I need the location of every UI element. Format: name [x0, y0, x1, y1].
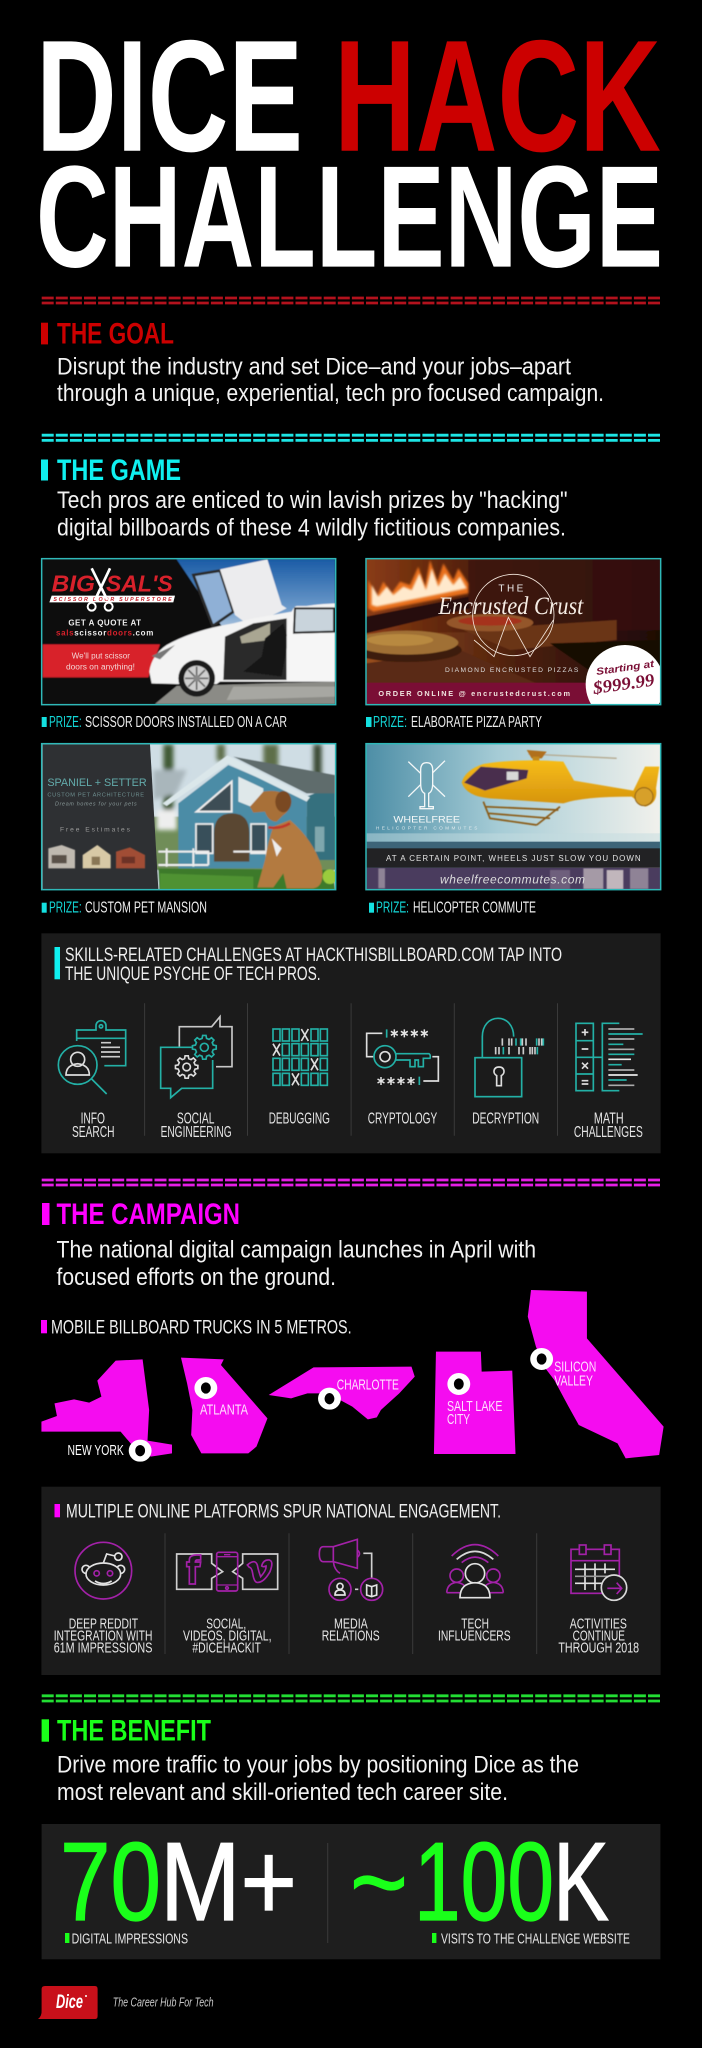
label: decryption: DECRYPTION — [472, 1110, 539, 1127]
icon: reddit — [75, 1542, 132, 1599]
subheading: mobile billboard trucks: MOBILE BILLBOARD TRUCKS IN 5 METROS. — [51, 1316, 352, 1338]
map labels: SALT LAKE — [447, 1399, 503, 1415]
label: reddit: INTEGRATION WITH — [54, 1629, 152, 1645]
label: reddit — [54, 1617, 152, 1657]
billboard: The Encrusted Crust: Encrusted Crust — [437, 592, 584, 620]
label: activities: CONTINUE — [573, 1629, 625, 1645]
label: media relations: RELATIONS — [322, 1629, 380, 1645]
label: social engineering — [161, 1110, 232, 1141]
map: five metro states — [41, 1290, 664, 1459]
label: social engineering: SOCIAL — [177, 1110, 215, 1127]
billboard: Wheelfree helicopter commutes: WHEELFREE — [393, 815, 460, 825]
billboard: The Encrusted Crust: ORDER ONLINE @ encrustedcrust.com — [378, 689, 570, 698]
billboard logo — [49, 568, 175, 611]
title — [36, 7, 663, 298]
label: tech influencers: INFLUENCERS — [438, 1629, 511, 1645]
section: the campaign: The national digital campaign launches in April with — [56, 1236, 536, 1263]
title: DICE — [36, 7, 303, 185]
billboard: Wheelfree helicopter commutes — [366, 743, 661, 890]
section: the campaign: focused efforts on the ground. — [56, 1264, 336, 1291]
label: social engineering: ENGINEERING — [161, 1124, 232, 1141]
section: the goal — [41, 318, 604, 407]
prize caption: helicopter commute — [369, 900, 536, 917]
billboard: Big Sal's scissor doors: salsscissordoors.com — [56, 628, 153, 637]
billboard: The Encrusted Crust: DIAMOND ENCRUSTED PIZZAS — [445, 667, 579, 674]
prize caption: helicopter commute: PRIZE: — [376, 900, 409, 917]
icon: tech influencers — [447, 1545, 503, 1598]
section: the game: digital billboards of these 4 wildly fictitious companies. — [57, 515, 566, 542]
prize caption: scissor doors: PRIZE: — [49, 714, 82, 731]
stat label: digital impressions: DIGITAL IMPRESSIONS — [72, 1930, 188, 1947]
prize caption: helicopter commute: HELICOPTER COMMUTE — [413, 900, 536, 917]
billboard: Wheelfree helicopter commutes: AT A CERTAIN POINT, WHEELS JUST SLOW YOU DOWN — [386, 854, 641, 863]
stat: ~100K: K — [553, 1820, 609, 1944]
section: the game: THE GAME — [57, 454, 181, 487]
label: activities: THROUGH 2018 — [558, 1641, 639, 1657]
panel: skills-related challenges — [41, 933, 661, 1153]
stat: ~100K: 100 — [414, 1820, 554, 1944]
state: California — [528, 1290, 664, 1458]
icon: math challenges — [576, 1023, 643, 1091]
label: info search — [72, 1110, 114, 1141]
section: the campaign: THE CAMPAIGN — [56, 1198, 240, 1231]
prize caption: pizza party — [366, 714, 542, 731]
billboard: The Encrusted Crust: $999.99 — [591, 670, 656, 698]
label: social platforms — [183, 1617, 272, 1657]
stat label: digital impressions — [65, 1930, 188, 1947]
map labels: CHARLOTTE — [337, 1377, 399, 1393]
location markers — [132, 1351, 550, 1459]
billboard: The Encrusted Crust: THE — [498, 584, 524, 595]
section: the benefit — [42, 1715, 579, 1806]
label: social platforms: VIDEOS, DIGITAL, — [183, 1629, 272, 1645]
helicopter — [462, 750, 659, 825]
section: the benefit: THE BENEFIT — [57, 1715, 211, 1748]
label: social platforms: #DICEHACKIT — [192, 1641, 261, 1657]
panel heading — [54, 944, 562, 985]
billboard: Big Sal's scissor doors: GET A QUOTE AT — [68, 619, 141, 628]
label: math challenges: CHALLENGES — [574, 1124, 643, 1141]
icon: cryptology — [367, 1029, 438, 1085]
stat: 70M+ — [60, 1820, 297, 1944]
label: info search: SEARCH — [72, 1124, 114, 1141]
house thumbnails — [48, 845, 145, 868]
label: reddit: DEEP REDDIT — [69, 1617, 138, 1633]
billboard: The Encrusted Crust — [365, 558, 662, 706]
billboard logo: BIG — [52, 571, 95, 597]
label: info search: INFO — [81, 1110, 105, 1127]
billboard: Big Sal's scissor doors — [42, 558, 336, 705]
section: the goal: THE GOAL — [57, 318, 174, 351]
stat: 70M+: 70 — [60, 1820, 161, 1944]
prize caption: pet mansion — [42, 900, 207, 917]
icon: decryption — [475, 1018, 543, 1097]
section: the benefit: Drive more traffic to your jobs by positioning Dice as the — [57, 1752, 579, 1779]
icon: social platforms — [177, 1552, 278, 1591]
label: media relations — [322, 1617, 380, 1645]
billboard logo: SCISSOR DOOR SUPERSTORE — [53, 597, 172, 603]
panel heading: MULTIPLE ONLINE PLATFORMS SPUR NATIONAL ENGAGEMENT. — [66, 1500, 501, 1522]
prize caption: pet mansion: PRIZE: — [49, 900, 82, 917]
panel: online platforms — [41, 1487, 661, 1675]
section: the goal: Disrupt the industry and set Dice–and your jobs–apart — [57, 354, 571, 381]
billboard logo: SAL'S — [106, 571, 173, 597]
billboard: Spaniel + Setter: Free Estimates — [60, 827, 131, 834]
label: math challenges — [574, 1110, 643, 1141]
section: the goal: through a unique, experiential, tech pro focused campaign. — [57, 380, 604, 407]
label: tech influencers — [438, 1617, 511, 1645]
logo: Dice: Dice — [56, 1992, 83, 2013]
label: cryptology: CRYPTOLOGY — [368, 1110, 437, 1127]
section: the game — [41, 454, 568, 542]
section: the benefit: most relevant and skill-oriented tech career site. — [57, 1779, 508, 1806]
map labels: NEW YORK — [68, 1443, 124, 1459]
billboard: Big Sal's scissor doors: doors on anything! — [66, 662, 135, 671]
stat: ~100K: ~ — [350, 1820, 408, 1944]
map labels: SILICON — [554, 1360, 596, 1376]
label: activities — [558, 1617, 639, 1657]
stat: 70M+: M+ — [160, 1820, 297, 1944]
section: the game: Tech pros are enticed to win lavish prizes by "hacking" — [57, 487, 568, 514]
label: reddit: 61M IMPRESSIONS — [54, 1641, 152, 1657]
billboard: Spaniel + Setter: Dream homes for your pets — [55, 802, 137, 808]
icon: social engineering — [161, 1017, 232, 1098]
icon: info search — [58, 1021, 126, 1094]
panel heading: THE UNIQUE PSYCHE OF TECH PROS. — [65, 963, 321, 985]
billboard: Spaniel + Setter — [42, 743, 337, 890]
billboard: Wheelfree helicopter commutes: HELICOPTER COMMUTES — [376, 825, 477, 830]
pizza logo — [473, 574, 554, 657]
icon: media relations — [319, 1539, 383, 1600]
label: media relations: MEDIA — [334, 1617, 368, 1633]
label: debugging: DEBUGGING — [269, 1110, 330, 1127]
prize caption: pet mansion: CUSTOM PET MANSION — [85, 900, 207, 917]
label: activities: ACTIVITIES — [570, 1617, 627, 1633]
billboard: Big Sal's scissor doors: We'll put scissor — [72, 651, 130, 660]
label: tech influencers: TECH — [461, 1617, 489, 1633]
logo: Dice — [38, 1986, 98, 2019]
icon: activities calendar — [571, 1545, 627, 1600]
tagline: The Career Hub For Tech — [113, 1995, 214, 2010]
state: New York — [41, 1359, 172, 1457]
prize caption: pizza party: PRIZE: — [373, 714, 407, 731]
map labels: ATLANTA — [200, 1402, 248, 1418]
prize caption: scissor doors — [42, 714, 287, 731]
billboard: Spaniel + Setter: CUSTOM PET ARCHITECTURE — [47, 793, 144, 799]
state: North Carolina — [269, 1367, 415, 1419]
prize caption: scissor doors: SCISSOR DOORS INSTALLED ON A CAR — [85, 714, 287, 731]
label: social platforms: SOCIAL, — [206, 1617, 246, 1633]
wheelfree logo — [408, 761, 445, 809]
billboard: Spaniel + Setter: SPANIEL + SETTER — [47, 777, 147, 789]
map labels: VALLEY — [554, 1373, 593, 1389]
billboard: The Encrusted Crust: Starting at — [596, 659, 656, 678]
state: Utah — [434, 1352, 516, 1454]
map labels — [68, 1360, 596, 1459]
prize caption: pizza party: ELABORATE PIZZA PARTY — [411, 714, 542, 731]
state: Georgia — [181, 1358, 267, 1453]
billboard: Wheelfree helicopter commutes: wheelfreecommutes.com — [440, 872, 585, 886]
panel: results — [42, 1820, 660, 1959]
section: the campaign — [42, 1198, 536, 1291]
map labels: CITY — [447, 1412, 470, 1428]
label: math challenges: MATH — [594, 1110, 624, 1127]
icon: debugging — [273, 1029, 327, 1085]
